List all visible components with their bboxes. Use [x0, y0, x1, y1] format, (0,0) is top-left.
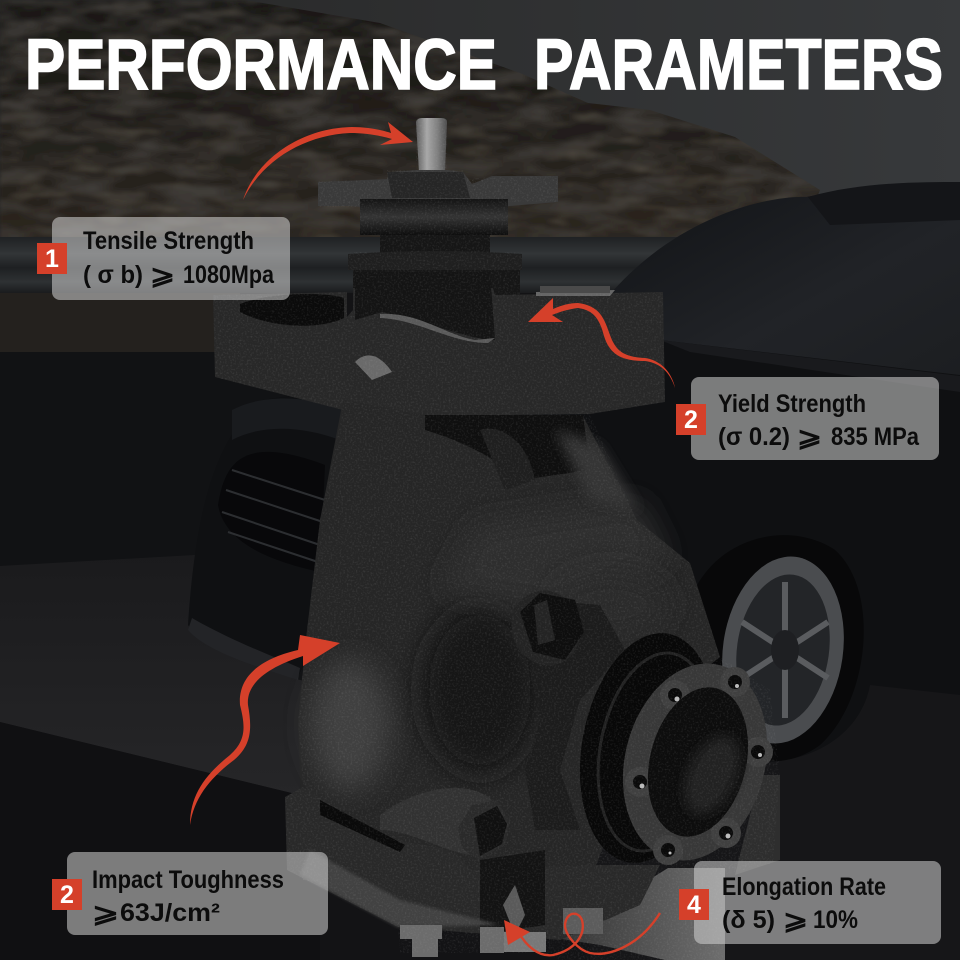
shaft: [416, 118, 447, 172]
text: elongation rate value: [722, 873, 886, 935]
studs: [400, 908, 603, 957]
badge 4: 4: [687, 891, 701, 919]
callout 4: elongation rate: [679, 861, 941, 944]
output flange: [603, 648, 787, 876]
arrow: to shaft: [243, 122, 413, 200]
rear casing tab: [735, 775, 780, 875]
text: tensile strength value: 1080Mpa: [183, 261, 275, 289]
badge 2: 2: [684, 406, 698, 434]
shading on body: [310, 430, 670, 790]
text: impact toughness value: ⩾: [92, 898, 119, 928]
output flange seal: [563, 622, 733, 874]
flange wings: [318, 170, 558, 208]
callout 2: yield strength: [676, 377, 939, 460]
arrow: to arm: [528, 298, 675, 388]
badge 1: 1: [45, 245, 59, 273]
text: yield strength value: ⩾: [797, 422, 822, 452]
badge 1: [37, 243, 67, 274]
text: yield strength value: [718, 390, 920, 452]
text: tensile strength value: [83, 227, 275, 290]
text: tensile strength value: ⩾: [150, 260, 175, 290]
upper bolt: [501, 581, 591, 675]
neck: [380, 235, 490, 253]
text: tensile strength value: ( σ b): [83, 261, 143, 289]
text: impact toughness value: Impact Toughness: [92, 866, 284, 894]
cast iron grain: [210, 115, 785, 960]
bracket: [555, 868, 725, 960]
badge 2: [52, 879, 82, 910]
badge 4: [679, 889, 709, 920]
badge 2: [676, 404, 706, 435]
text: yield strength value: 835 MPa: [831, 423, 920, 451]
body: [298, 400, 720, 880]
text: tensile strength value: Tensile Strength: [83, 227, 254, 255]
text: impact toughness value: [92, 866, 284, 928]
title: [25, 26, 943, 105]
base: [285, 787, 660, 940]
arrow: to base: [504, 913, 660, 955]
text: impact toughness value: 63J/cm²: [120, 899, 220, 927]
text: elongation rate value: Elongation Rate: [722, 873, 886, 901]
ribs near flange: [525, 600, 625, 830]
lower bolt: [458, 800, 510, 860]
lower bolt bosses: [380, 788, 492, 855]
text: elongation rate value: (δ 5): [722, 906, 775, 934]
text: yield strength value: Yield Strength: [718, 390, 866, 418]
text: elongation rate value: ⩾: [783, 905, 808, 935]
arm: [213, 288, 665, 416]
badge 2: 2: [60, 881, 74, 909]
text: yield strength value: (σ 0.2): [718, 423, 790, 451]
callout 3: impact toughness: [52, 852, 328, 935]
text: elongation rate value: 10%: [813, 906, 858, 934]
gearbox part: [210, 115, 787, 960]
car: [188, 182, 960, 762]
callout 1: tensile strength: [37, 217, 290, 300]
title: PERFORMANCE: [25, 26, 497, 105]
arrow: to body: [190, 635, 340, 825]
